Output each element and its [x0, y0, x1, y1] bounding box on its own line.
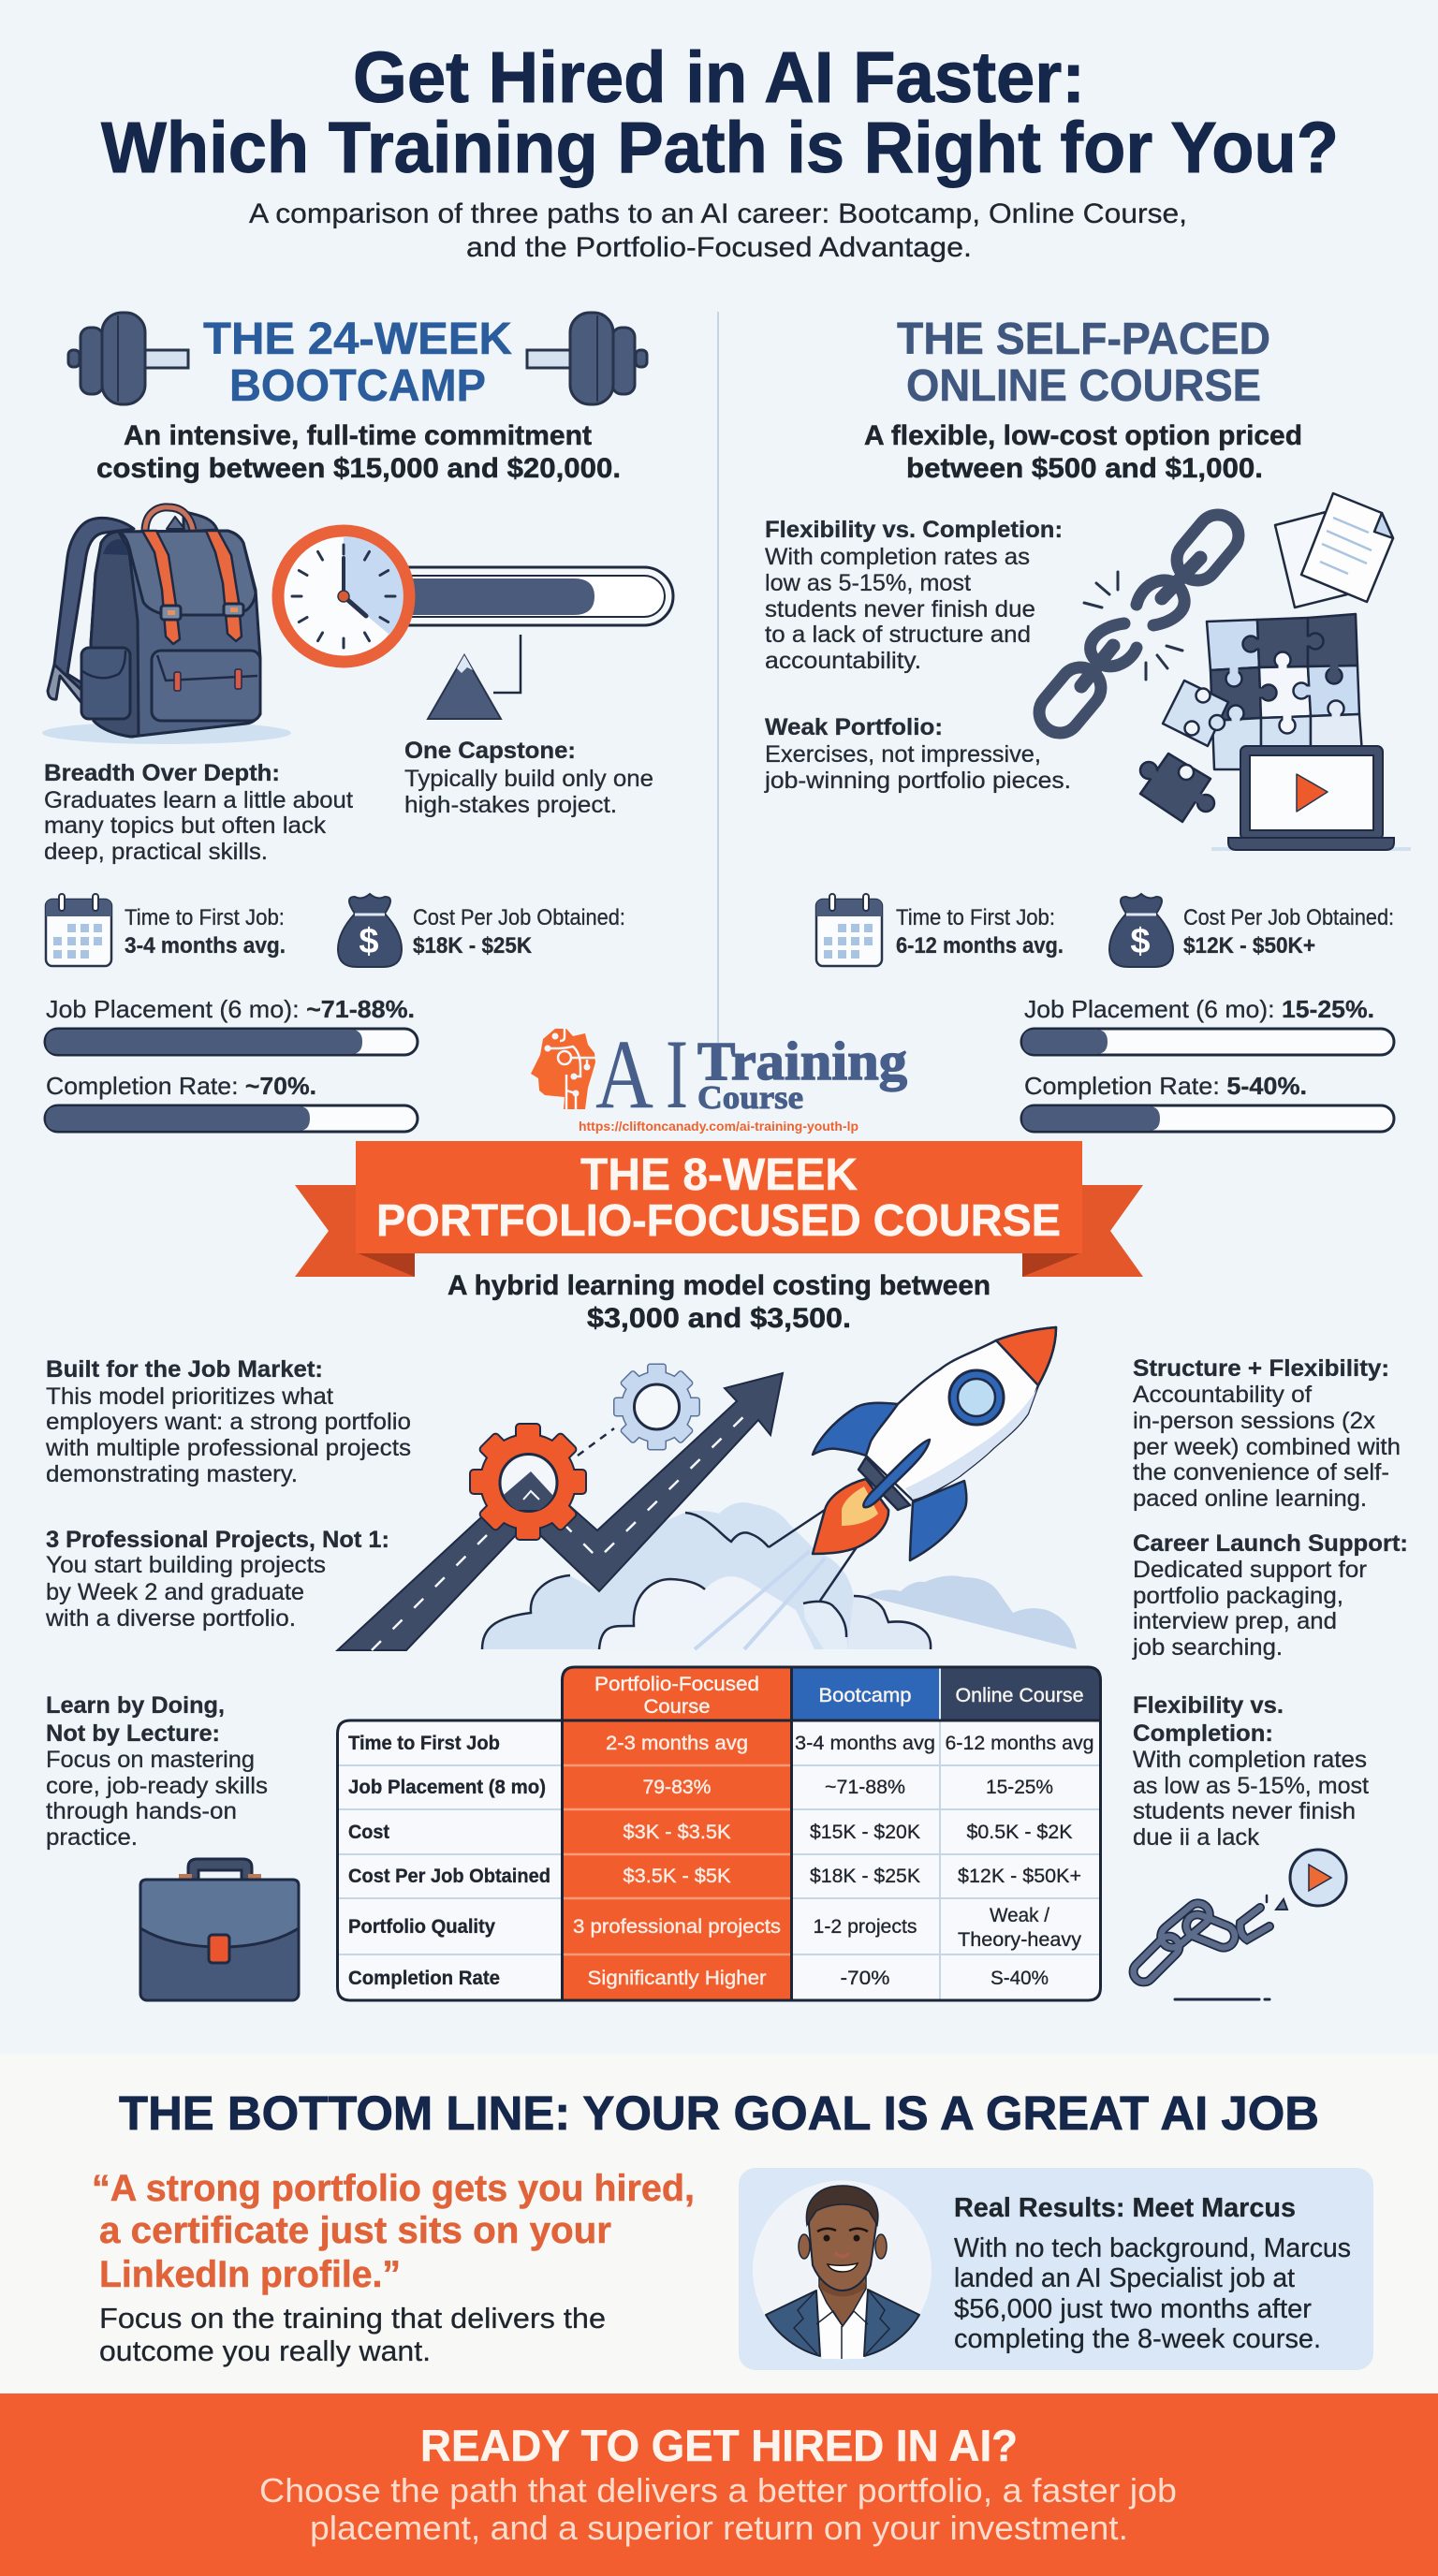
portfolio-focused values: $3.5K - $5K: [624, 1866, 730, 1887]
online course values: 15-25%: [986, 1777, 1053, 1798]
card: meet marcus: [739, 2168, 1373, 2370]
text: structure + flexibility: Accountability of: [1133, 1382, 1312, 1408]
text: breadth over depth: Graduates learn a little about: [44, 787, 353, 813]
logo: AI Training Course: [531, 1019, 907, 1134]
banner: [295, 1141, 1143, 1277]
text: 3 professional projects: 3 Professional Projects, Not 1:: [46, 1527, 389, 1553]
text: flexibility vs completion: students never finish due: [765, 596, 1035, 622]
text: learn by doing: core, job-ready skills: [46, 1773, 268, 1799]
icon: briefcase: [140, 1859, 299, 2000]
text: career launch support: job searching.: [1132, 1634, 1283, 1661]
text: 3 professional projects: with a diverse portfolio.: [45, 1605, 296, 1632]
icon: small broken chain: [1129, 1895, 1287, 1999]
heading: bootcamp: [203, 315, 512, 411]
text: structure + flexibility: per week) combined with: [1133, 1434, 1401, 1460]
row labels: Completion Rate: [348, 1968, 500, 1989]
icon: backpack: [42, 507, 291, 744]
icon: clock with progress bar: [278, 531, 673, 662]
cta text: Choose the path that delivers a better portfolio, a faster job: [259, 2471, 1177, 2510]
clouds: [482, 1502, 1077, 1649]
portfolio-focused values: [573, 1733, 781, 1989]
text: structure + flexibility: [1133, 1355, 1401, 1512]
rocket: [813, 1327, 1056, 1560]
quote: “A strong portfolio gets you hired,: [92, 2168, 695, 2209]
heading: bootcamp: BOOTCAMP: [229, 361, 486, 411]
icon: laptop with play: [1211, 746, 1411, 850]
online course values: Theory-heavy: [958, 1929, 1082, 1951]
text: flexibility vs completion: [765, 517, 1063, 674]
comparison table: [337, 1667, 1101, 2000]
text: built for the job market: with multiple professional projects: [45, 1435, 411, 1461]
portfolio-focused values: 79-83%: [642, 1777, 712, 1798]
quote: LinkedIn profile.”: [99, 2254, 401, 2295]
text: flexibility vs completion: Flexibility vs. Completion:: [765, 517, 1063, 543]
text: career launch support: portfolio packaging,: [1133, 1583, 1343, 1609]
icon: broken chain: [1031, 506, 1247, 741]
bootcamp values: 1-2 projects: [813, 1916, 917, 1938]
bootcamp values: [795, 1733, 935, 1989]
text: career launch support: [1132, 1530, 1408, 1661]
illustration: road, gears, rocket, clouds: [337, 1327, 1077, 1650]
cta text: placement, and a superior return on your investment.: [310, 2509, 1128, 2547]
bootcamp values: -70%: [841, 1968, 889, 1989]
column headers: Bootcamp: [818, 1685, 912, 1706]
stat: cost per job: Cost Per Job Obtained:: [413, 905, 625, 930]
text: one capstone: Typically build only one: [404, 766, 653, 792]
text: 3 professional projects: [45, 1527, 389, 1632]
stat: time to first job: 6-12 months avg.: [896, 933, 1064, 959]
icon: left dumbbell: [68, 313, 188, 404]
panel: self-paced online course: [764, 315, 1411, 1132]
text: career launch support: Career Launch Support:: [1133, 1530, 1408, 1557]
stat: cost per job: $18K - $25K: [413, 933, 533, 959]
panel: bottom line: [0, 2054, 1438, 2393]
text: built for the job market: Built for the Job Market:: [46, 1356, 323, 1383]
subtitle: [249, 198, 1187, 263]
text: real results: $56,000 just two months after: [954, 2294, 1312, 2324]
bar: online completion rate: Completion Rate: 5-40%.: [1024, 1072, 1307, 1100]
portfolio-focused values: 2-3 months avg: [606, 1733, 748, 1754]
text: weak portfolio: Weak Portfolio:: [765, 714, 943, 740]
subtitle: A comparison of three paths to an AI career: Bootcamp, Online Course,: [249, 198, 1187, 229]
text: learn by doing: through hands-on: [46, 1798, 237, 1824]
text: learn by doing: Not by Lecture:: [46, 1720, 220, 1747]
logo url: https://cliftoncanady.com/ai-training-youth-lp: [579, 1119, 858, 1134]
text: structure + flexibility: Structure + Flexibility:: [1133, 1355, 1389, 1382]
icon: documents: [1275, 493, 1393, 607]
portfolio summary: [448, 1270, 990, 1334]
text: flexibility vs completion: With completion rates as: [765, 544, 1030, 570]
bootcamp summary: costing between $15,000 and $20,000.: [96, 453, 621, 484]
logo wordmark: Training: [697, 1031, 907, 1091]
text: career launch support: Dedicated support for: [1133, 1557, 1367, 1583]
text: focus on the training: Focus on the training that delivers the: [99, 2302, 606, 2334]
bar: bootcamp completion rate: [45, 1072, 418, 1132]
bar: online job placement: Job Placement (6 mo): 15-25%.: [1024, 995, 1374, 1023]
avatar: [753, 2181, 932, 2359]
heading: bottom line: THE BOTTOM LINE: YOUR GOAL IS A GREAT AI JOB: [119, 2086, 1319, 2140]
orange gear: [471, 1425, 585, 1539]
column headers: Online Course: [955, 1685, 1084, 1706]
text: breadth over depth: deep, practical skills.: [44, 839, 268, 865]
subtitle: and the Portfolio-Focused Advantage.: [466, 232, 972, 263]
banner: PORTFOLIO-FOCUSED COURSE: [376, 1196, 1061, 1246]
column headers: Portfolio-Focused: [594, 1674, 759, 1695]
online course summary: between $500 and $1,000.: [906, 453, 1263, 484]
text: one capstone: high-stakes project.: [404, 792, 617, 818]
text: career launch support: interview prep, and: [1133, 1608, 1337, 1634]
text: learn by doing: practice.: [46, 1824, 138, 1851]
text: 3 professional projects: You start building projects: [46, 1552, 326, 1578]
text: built for the job market: employers want: a strong portfolio: [46, 1409, 411, 1435]
road arrow: [337, 1373, 783, 1650]
text: breadth over depth: Breadth Over Depth:: [44, 760, 280, 786]
column headers: Course: [644, 1696, 710, 1718]
title: [101, 37, 1339, 188]
online course values: S-40%: [990, 1968, 1049, 1989]
text: 3 professional projects: by Week 2 and graduate: [46, 1579, 304, 1605]
logo wordmark: Course: [697, 1079, 803, 1116]
icon: play button: [1290, 1850, 1346, 1906]
column: portfolio-focused fill: [562, 1667, 792, 2000]
row labels: Cost Per Job Obtained: [348, 1866, 550, 1887]
text: flexibility vs completion: accountability.: [765, 648, 921, 674]
text: focus on the training: outcome you really want.: [99, 2334, 431, 2367]
portfolio summary: A hybrid learning model costing between: [448, 1270, 990, 1301]
heading: online course: ONLINE COURSE: [906, 361, 1261, 411]
logo wordmark: I: [666, 1019, 688, 1129]
stat: cost per job: Cost Per Job Obtained:: [1183, 905, 1394, 930]
icon: money bag: $: [1130, 922, 1151, 961]
text: weak portfolio: Exercises, not impressive,: [765, 741, 1041, 768]
text: real results: [954, 2193, 1351, 2354]
portfolio-focused values: Significantly Higher: [588, 1968, 766, 1989]
text: one capstone: [404, 738, 653, 818]
text: real results: Real Results: Meet Marcus: [954, 2193, 1296, 2223]
online course values: 6-12 months avg: [946, 1733, 1093, 1754]
banner: THE 8-WEEK: [580, 1150, 858, 1200]
bar: online job placement: [1021, 995, 1394, 1055]
text: built for the job market: [45, 1356, 411, 1487]
online course summary: A flexible, low-cost option priced: [864, 420, 1302, 451]
text: flexibility vs completion: [1133, 1692, 1369, 1851]
portfolio-focused values: $3K - $3.5K: [624, 1822, 730, 1843]
icon: money bag: [1109, 894, 1173, 967]
footer call to action: [0, 2393, 1438, 2576]
panel: 8-week portfolio course: [45, 1141, 1408, 2000]
text: learn by doing: [46, 1692, 268, 1851]
logo wordmark: [595, 1019, 907, 1129]
text: real results: completing the 8-week course.: [954, 2324, 1321, 2354]
stat: cost per job: [413, 905, 625, 959]
quote: [92, 2168, 695, 2295]
text: structure + flexibility: paced online learning.: [1133, 1486, 1367, 1512]
stat: cost per job: $12K - $50K+: [1183, 933, 1315, 959]
text: structure + flexibility: the convenience of self-: [1133, 1459, 1389, 1486]
text: weak portfolio: job-winning portfolio pieces.: [764, 768, 1071, 794]
title: Get Hired in AI Faster:: [353, 37, 1085, 118]
text: learn by doing: Learn by Doing,: [46, 1692, 225, 1719]
icon: calendar: [816, 894, 882, 966]
title: Which Training Path is Right for You?: [101, 108, 1339, 188]
text: focus on the training: [99, 2302, 606, 2367]
row labels: Cost: [348, 1822, 389, 1843]
icon: puzzle: [1140, 614, 1362, 822]
portfolio-focused values: 3 professional projects: [573, 1916, 781, 1938]
text: flexibility vs completion: students never finish: [1133, 1798, 1356, 1824]
online course summary: [864, 420, 1302, 484]
bootcamp summary: An intensive, full-time commitment: [124, 420, 592, 451]
portfolio summary: $3,000 and $3,500.: [587, 1303, 851, 1334]
column headers: [594, 1667, 1101, 1720]
logo wordmark: A: [595, 1019, 653, 1129]
bootcamp values: $18K - $25K: [810, 1866, 920, 1887]
text: real results: landed an AI Specialist job at: [954, 2263, 1295, 2293]
row labels: Portfolio Quality: [348, 1916, 495, 1938]
heading: online course: [897, 315, 1270, 411]
bar: online completion rate: [1021, 1072, 1394, 1132]
stat: time to first job: [896, 905, 1064, 959]
text: breadth over depth: [44, 760, 353, 865]
text: flexibility vs completion: low as 5-15%, most: [765, 570, 971, 596]
text: flexibility vs completion: With completion rates: [1133, 1747, 1367, 1773]
text: real results: With no tech background, Marcus: [954, 2233, 1351, 2263]
text: weak portfolio: [764, 714, 1071, 794]
row labels: Time to First Job: [348, 1733, 500, 1754]
icon: AI head: [531, 1029, 595, 1109]
icon: money bag: [338, 894, 402, 967]
icon: right dumbbell: [527, 313, 647, 404]
bootcamp values: ~71-88%: [825, 1777, 905, 1798]
bar: bootcamp job placement: Job Placement (6 mo): ~71-88%.: [46, 995, 415, 1023]
text: flexibility vs completion: Completion:: [1133, 1720, 1273, 1747]
row labels: Job Placement (8 mo): [348, 1777, 546, 1798]
icon: money bag: $: [359, 922, 379, 961]
icon: mountain capstone: [428, 635, 521, 719]
online course values: $0.5K - $2K: [966, 1822, 1073, 1843]
stat: cost per job: [1183, 905, 1394, 959]
text: flexibility vs completion: to a lack of structure and: [765, 622, 1031, 648]
blue gear: [578, 1365, 698, 1456]
bootcamp values: 3-4 months avg: [795, 1733, 935, 1754]
heading: bootcamp: THE 24-WEEK: [203, 315, 512, 364]
online course values: Weak /: [990, 1905, 1049, 1926]
row labels: [348, 1733, 550, 1989]
text: learn by doing: Focus on mastering: [46, 1747, 255, 1773]
text: flexibility vs completion: as low as 5-15%, most: [1133, 1773, 1369, 1799]
stat: time to first job: Time to First Job:: [125, 905, 285, 930]
icon: calendar: [46, 894, 111, 966]
stat: time to first job: 3-4 months avg.: [125, 933, 286, 959]
online course values: $12K - $50K+: [958, 1866, 1081, 1887]
cta heading: READY TO GET HIRED IN AI?: [420, 2421, 1018, 2470]
text: structure + flexibility: in-person sessions (2x: [1133, 1408, 1376, 1434]
text: built for the job market: demonstrating mastery.: [46, 1461, 298, 1487]
stat: time to first job: [125, 905, 286, 959]
bootcamp summary: [96, 420, 621, 484]
text: one capstone: One Capstone:: [404, 738, 576, 764]
bar: bootcamp job placement: [45, 995, 418, 1055]
cta text: [259, 2471, 1177, 2547]
quote: a certificate just sits on your: [99, 2210, 611, 2251]
bootcamp values: $15K - $20K: [810, 1822, 920, 1843]
text: flexibility vs completion: due ii a lack: [1133, 1824, 1259, 1851]
online course values: [946, 1733, 1093, 1989]
text: built for the job market: This model prioritizes what: [46, 1383, 333, 1410]
text: flexibility vs completion: Flexibility vs.: [1133, 1692, 1284, 1719]
heading: online course: THE SELF-PACED: [897, 315, 1270, 364]
stat: time to first job: Time to First Job:: [896, 905, 1055, 930]
text: breadth over depth: many topics but often lack: [44, 812, 327, 839]
panel: bootcamp: [42, 313, 673, 1132]
bar: bootcamp completion rate: Completion Rate: ~70%.: [46, 1072, 316, 1100]
